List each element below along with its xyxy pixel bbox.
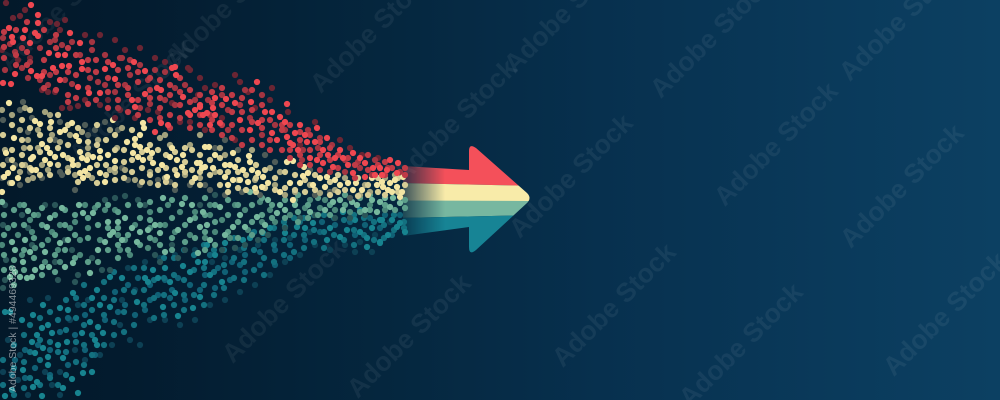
watermark: repeated Adobe Stock text: Adobe Stock: [63, 33, 199, 169]
red particle stream: [2, 3, 405, 178]
yellow particle stream: [2, 102, 405, 200]
arrow with four colour stripes: [403, 146, 530, 252]
watermark: repeated Adobe Stock text: Adobe Stock: [834, 118, 970, 254]
green particle stream: [2, 192, 405, 288]
particle streams: [2, 3, 405, 396]
watermark: repeated Adobe Stock text: Adobe Stock: [387, 53, 523, 189]
teal particle stream: [3, 210, 405, 396]
watermark: repeated Adobe Stock text: Adobe Stock: [546, 237, 682, 373]
watermark: repeated Adobe Stock text: Adobe Stock: [341, 268, 477, 400]
watermark: repeated Adobe Stock text: Adobe Stock: [216, 233, 352, 369]
watermark: repeated Adobe Stock text: Adobe Stock: [503, 108, 639, 244]
watermark: repeated Adobe Stock text: Adobe Stock: [708, 76, 844, 212]
vertical stock id text: Adobe Stock | #494469328: [7, 265, 19, 392]
